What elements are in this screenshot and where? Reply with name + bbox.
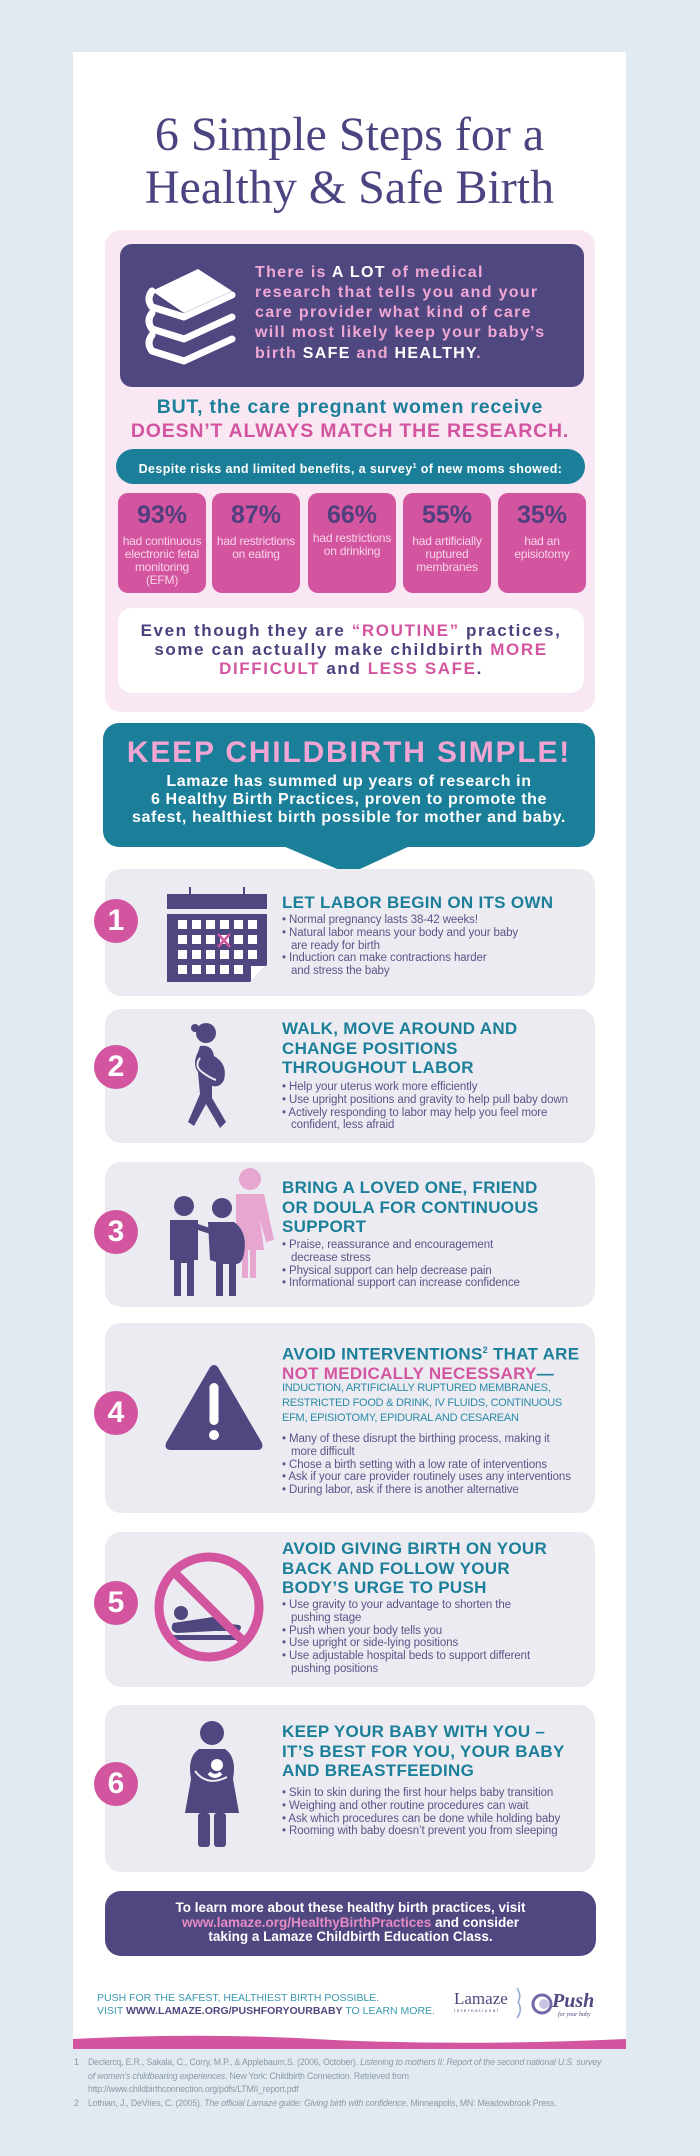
stat: 93%: (EFM) — [146, 572, 178, 586]
bullets 3: decrease stress — [291, 1252, 371, 1264]
bullets 4: more difficult — [291, 1446, 355, 1458]
heading 4 — [282, 1345, 579, 1383]
text: research statement — [255, 264, 545, 362]
text: research statement: There is A LOT of medical — [255, 264, 484, 281]
heading: keep childbirth simple: KEEP CHILDBIRTH SIMPLE! — [127, 736, 571, 769]
number 4 — [94, 1391, 138, 1435]
intervention list — [282, 1382, 562, 1424]
step 5 — [105, 1532, 595, 1687]
bullets 3 — [282, 1239, 520, 1289]
logo: Push for your baby: for your baby — [558, 2012, 591, 2018]
icon: mother holding baby — [185, 1721, 239, 1847]
heading 4: NOT MEDICALLY NECESSARY— — [282, 1364, 554, 1383]
learn more callout: taking a Lamaze Childbirth Education Class. — [208, 1929, 493, 1944]
heading 6 — [282, 1722, 565, 1780]
icon: warning triangle — [166, 1365, 262, 1450]
stat: 93%: monitoring — [135, 560, 189, 574]
number 6: 6 — [108, 1767, 124, 1800]
number 4: 4 — [108, 1396, 124, 1429]
heading 3: BRING A LOVED ONE, FRIEND — [282, 1178, 538, 1197]
footer tagline — [97, 1992, 435, 2017]
bullets 5: • Use adjustable hospital beds to support different — [282, 1650, 530, 1662]
stat: 66%: on drinking — [324, 544, 380, 558]
heading 5: AVOID GIVING BIRTH ON YOUR — [282, 1539, 547, 1558]
heading 3: OR DOULA FOR CONTINUOUS — [282, 1198, 539, 1216]
stat: 55%: membranes — [416, 560, 478, 574]
number 1 — [94, 899, 138, 943]
stat: 87%: had restrictions — [217, 534, 295, 548]
footnotes: 1 — [74, 2057, 79, 2067]
logo: Lamaze: Lamaze — [454, 1989, 508, 2008]
bullets 5: • Use upright or side-lying positions — [282, 1637, 458, 1649]
stat: 55%: ruptured — [425, 546, 469, 560]
heading 5 — [282, 1539, 547, 1597]
text: lamaze summary: 6 Healthy Birth Practices, proven to promote the — [151, 791, 547, 808]
stat: 66%: had restrictions — [313, 530, 391, 544]
text: research statement: will most likely keep your baby’s — [255, 324, 545, 341]
heading 6: KEEP YOUR BABY WITH YOU – — [282, 1722, 545, 1741]
heading 2 — [282, 1019, 517, 1077]
intervention list: INDUCTION, ARTIFICIALLY RUPTURED MEMBRANES, — [282, 1382, 551, 1394]
routine practices callout — [118, 608, 584, 693]
number 3: 3 — [108, 1215, 124, 1248]
icon: no lying on back — [154, 1552, 264, 1662]
step 3 — [105, 1162, 595, 1307]
step 6 — [105, 1705, 595, 1872]
logo: Lamaze: International — [454, 2008, 500, 2013]
stat: 93%: electronic fetal — [125, 546, 199, 560]
step 2 — [105, 1009, 595, 1143]
pink wave band — [73, 2036, 626, 2049]
footnotes: Declercq, E.R., Sakala, C., Corry, M.P., & Applebaum,S. (2006, October). Listening to mothers II: Report of the second national U.S. survey — [88, 2057, 601, 2067]
teal survey bar: Despite risks and limited benefits, a survey1 of new moms showed: — [139, 462, 562, 476]
bullets 5: pushing stage — [291, 1612, 361, 1624]
heading 6: IT’S BEST FOR YOU, YOUR BABY — [282, 1742, 565, 1760]
bullets 1: and stress the baby — [291, 965, 389, 977]
heading 1: LET LABOR BEGIN ON ITS OWN — [282, 893, 553, 912]
learn more callout — [105, 1891, 596, 1956]
learn more callout: To learn more about these healthy birth practices, visit — [175, 1900, 526, 1915]
bullets 4: • Ask if your care provider routinely uses any interventions — [282, 1471, 571, 1483]
icon: calendar — [167, 887, 267, 982]
text: lamaze summary — [132, 773, 566, 826]
bullets 3: • Praise, reassurance and encouragement — [282, 1239, 493, 1251]
stat: 35%: episiotomy — [514, 546, 570, 560]
routine practices callout: DIFFICULT and LESS SAFE. — [219, 659, 483, 678]
footnotes — [74, 2057, 602, 2108]
bullets 6 — [282, 1787, 560, 1837]
number 2: 2 — [108, 1050, 124, 1083]
number 6 — [94, 1762, 138, 1806]
icon: support people — [170, 1168, 274, 1296]
bullets 2: • Use upright positions and gravity to help pull baby down — [282, 1094, 568, 1106]
bullets 5: • Push when your body tells you — [282, 1625, 442, 1637]
routine practices callout: some can actually make childbirth MORE — [154, 640, 548, 659]
heading 2: THROUGHOUT LABOR — [282, 1058, 474, 1077]
teal survey bar — [116, 449, 585, 484]
stat: 87% — [212, 493, 300, 593]
heading 2: WALK, MOVE AROUND AND — [282, 1019, 517, 1038]
bullets 3: • Informational support can increase confidence — [282, 1277, 520, 1289]
text: research statement: research that tells you and your — [255, 284, 538, 301]
icon: walking pregnant woman — [188, 1023, 226, 1128]
heading 5: BODY’S URGE TO PUSH — [282, 1578, 487, 1597]
intervention list: RESTRICTED FOOD & DRINK, IV FLUIDS, CONTINUOUS — [282, 1397, 562, 1409]
bullets 6: • Ask which procedures can be done while holding baby — [282, 1813, 560, 1825]
bullets 1: • Natural labor means your body and your baby — [282, 927, 518, 939]
stat: 93%: had continuous — [123, 534, 201, 548]
icon: books — [145, 269, 236, 364]
title — [145, 108, 554, 214]
bullets 6: • Rooming with baby doesn’t prevent you from sleeping — [282, 1825, 558, 1837]
footnotes: of women's childbearing experiences. New York: Childbirth Connection. Retrieved from — [88, 2071, 409, 2081]
routine practices callout: Even though they are “ROUTINE” practices, — [141, 621, 561, 640]
heading 3 — [282, 1178, 539, 1236]
logo: Lamaze — [454, 1988, 521, 2018]
text: lamaze summary: Lamaze has summed up years of research in — [166, 773, 532, 790]
stat: 66%: 66% — [327, 501, 377, 529]
bullets 1 — [282, 914, 518, 977]
bullets 2 — [282, 1081, 568, 1131]
bullets 3: • Physical support can help decrease pain — [282, 1265, 492, 1277]
learn more callout: www.lamaze.org/HealthyBirthPractices and consider — [182, 1914, 519, 1930]
bullets 5 — [282, 1599, 530, 1675]
number 3 — [94, 1210, 138, 1254]
number 5: 5 — [108, 1586, 124, 1619]
bullets 2: confident, less afraid — [291, 1119, 394, 1131]
bullets 4: • Chose a birth setting with a low rate of interventions — [282, 1459, 547, 1471]
bullets 4 — [282, 1433, 571, 1496]
footnotes: http://www.childbirthconnection.org/pdfs/LTMII_report.pdf — [88, 2084, 298, 2094]
text: lamaze summary: safest, healthiest birth possible for mother and baby. — [132, 809, 566, 826]
text: but care doesn't match: BUT, the care pregnant women receive — [157, 396, 543, 418]
bullets 6: • Skin to skin during the first hour helps baby transition — [282, 1787, 553, 1799]
intervention list: EFM, EPISIOTOMY, EPIDURAL AND CESAREAN — [282, 1412, 519, 1424]
bullets 4: • During labor, ask if there is another alternative — [282, 1484, 519, 1496]
text: research statement: birth SAFE and HEALTHY. — [255, 345, 482, 362]
title: 6 Simple Steps for a — [155, 108, 544, 161]
bullets 4: • Many of these disrupt the birthing process, making it — [282, 1433, 550, 1445]
bullets 5: • Use gravity to your advantage to shorten the — [282, 1599, 511, 1611]
logo: Push for your baby — [532, 1990, 594, 2018]
heading 2: CHANGE POSITIONS — [282, 1038, 458, 1058]
stat: 35% — [498, 493, 586, 593]
bullets 6: • Weighing and other routine procedures can wait — [282, 1800, 528, 1812]
number 1: 1 — [108, 904, 124, 937]
stat: 66% — [308, 493, 396, 593]
bullets 2: • Help your uterus work more efficiently — [282, 1081, 477, 1093]
number 5 — [94, 1581, 138, 1625]
step 4 — [105, 1323, 595, 1513]
bullets 1: • Normal pregnancy lasts 38-42 weeks! — [282, 914, 478, 926]
heading 3: SUPPORT — [282, 1217, 366, 1236]
stat: 93% — [118, 493, 206, 593]
stat: 93%: 93% — [137, 501, 187, 529]
text: research statement: care provider what kind of care — [255, 304, 532, 321]
stat: 87%: 87% — [231, 501, 281, 529]
footer tagline: VISIT WWW.LAMAZE.ORG/PUSHFORYOURBABY TO LEARN MORE. — [97, 2005, 435, 2017]
stat: 55%: 55% — [422, 501, 472, 529]
bullets 1: are ready for birth — [291, 940, 380, 952]
heading 5: BACK AND FOLLOW YOUR — [282, 1558, 510, 1578]
bullets 1: • Induction can make contractions harder — [282, 952, 487, 964]
number 2 — [94, 1045, 138, 1089]
heading 4: AVOID INTERVENTIONS2 THAT ARE — [282, 1345, 579, 1364]
step 1 — [105, 869, 595, 996]
heading 6: AND BREASTFEEDING — [282, 1761, 474, 1780]
stat: 55% — [403, 493, 491, 593]
bullets 5: pushing positions — [291, 1663, 378, 1675]
title: Healthy & Safe Birth — [145, 161, 554, 214]
footer tagline: PUSH FOR THE SAFEST, HEALTHIEST BIRTH POSSIBLE. — [97, 1992, 379, 2004]
white card — [73, 52, 626, 2049]
keep childbirth simple banner — [103, 723, 595, 869]
stat: 35%: 35% — [517, 501, 567, 529]
stat: 55%: had artificially — [412, 534, 482, 548]
logo: Push for your baby: Push — [552, 1990, 594, 2012]
stat: 35%: had an — [524, 534, 560, 548]
footnotes: 2 — [74, 2098, 79, 2108]
text: but care doesn't match: DOESN’T ALWAYS MATCH THE RESEARCH. — [131, 420, 569, 442]
panel: research intro — [105, 230, 595, 712]
text: but care doesn't match — [131, 396, 569, 442]
footnotes: Lothian, J., DeVries, C. (2005). The official Lamaze guide: Giving birth with confidence. Minneapolis, MN: Meadowbrook Press. — [88, 2098, 557, 2108]
purple research box — [120, 244, 584, 387]
stat: 87%: on eating — [232, 546, 280, 560]
bullets 2: • Actively responding to labor may help you feel more — [282, 1107, 547, 1119]
